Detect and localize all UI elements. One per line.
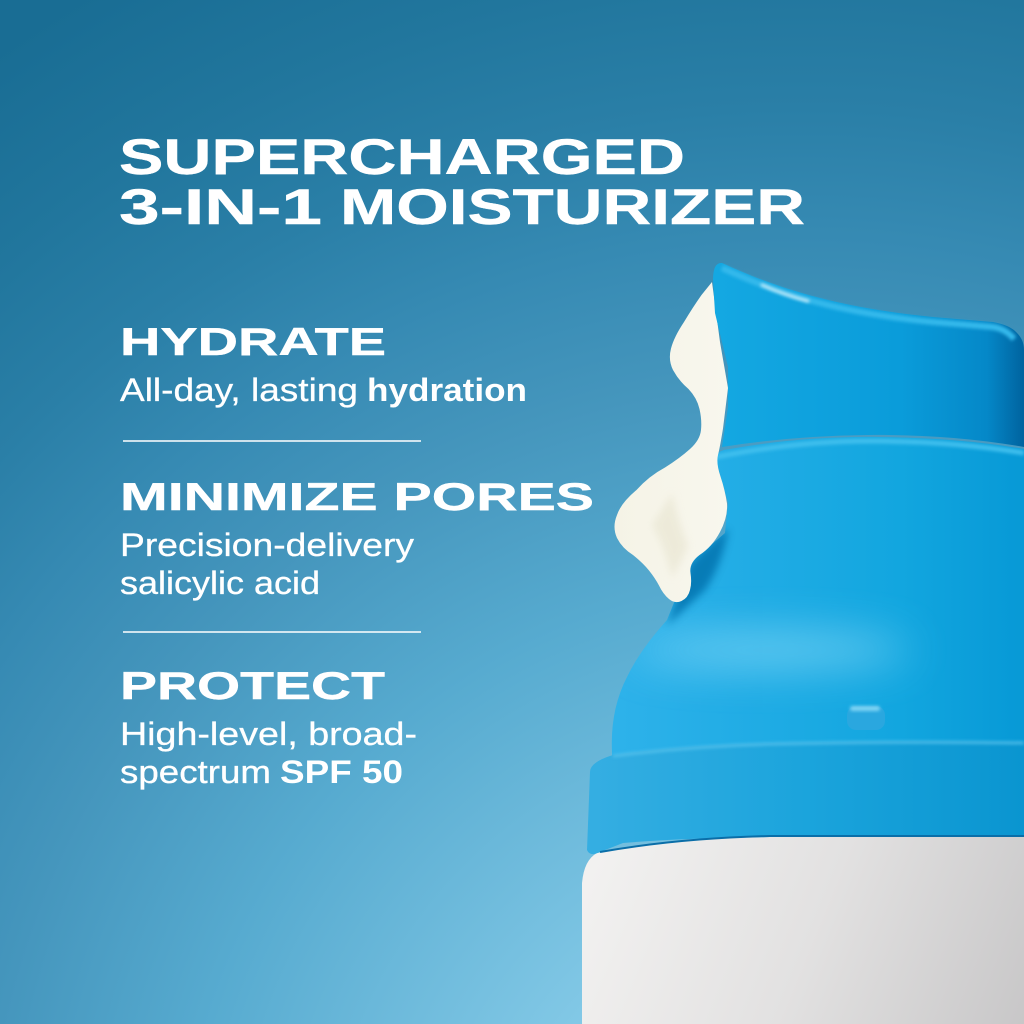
collar top rim [613,742,1024,756]
title: MOISTURIZER [340,179,805,235]
benefit: hydrate: All-day, lasting [120,372,358,408]
pump nub [847,706,885,730]
benefit: protect: PROTECT [120,665,385,708]
shell highlight [630,634,910,666]
product bottle [582,263,1024,1024]
collar bottom shadow [600,836,1024,852]
shell top rim [716,441,1024,457]
benefit: protect [120,665,417,790]
benefit: hydrate: hydration [367,372,527,408]
benefit: minimize pores: Precision-delivery [120,527,414,563]
benefit: minimize pores [120,476,594,601]
pump lower shell [612,437,1024,760]
benefit: protect: High-level, broad- [120,716,417,752]
head top rim [722,268,1014,339]
cream fold shading [652,493,688,578]
head shine [762,285,808,301]
benefit: hydrate: HYDRATE [120,321,386,364]
cream shadow [667,530,728,625]
benefit: hydrate [120,321,527,408]
benefit: minimize pores: MINIMIZE PORES [120,476,594,519]
title: SUPERCHARGED [119,129,685,185]
title [119,129,805,235]
cream dollop [614,282,728,602]
benefit: protect: SPF 50 [280,754,403,790]
benefit: protect: spectrum [120,754,271,790]
bottle body [582,836,1024,1024]
title: 3-IN-1 [119,179,322,235]
benefit: minimize pores: salicylic acid [120,565,320,601]
collar ring [587,741,1024,854]
pump upper head [713,263,1024,447]
